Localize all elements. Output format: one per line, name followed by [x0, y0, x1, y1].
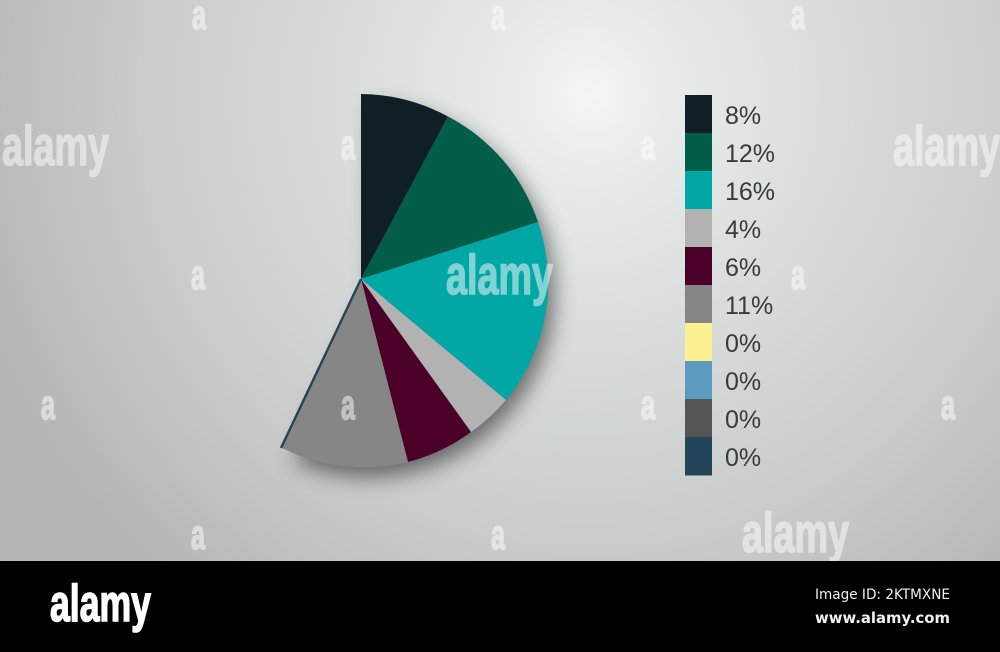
- watermarks: alamy: [742, 501, 849, 564]
- footer logo: alamy: [50, 575, 151, 633]
- watermarks: a: [341, 121, 355, 168]
- watermarks: a: [641, 121, 655, 168]
- legend row: 0% dark grey: 0%: [725, 406, 761, 434]
- legend row: 16%: 16%: [725, 178, 775, 206]
- watermarks: a: [641, 381, 655, 428]
- legend row: 12%: 12%: [725, 140, 775, 168]
- slice: 4%: [361, 279, 506, 432]
- pie chart: [281, 94, 548, 467]
- legend row: 0% yellow: [685, 323, 761, 361]
- watermarks: alamy: [446, 243, 553, 306]
- image id: Image ID: 2KTMXNE: [815, 587, 950, 603]
- legend row: 11%: 11%: [725, 292, 773, 320]
- legend row: 6%: [685, 247, 761, 285]
- slice: 8%: [361, 94, 448, 279]
- website: www.alamy.com: [815, 609, 950, 627]
- watermarks: alamy: [2, 114, 109, 177]
- slice edge: 0%: [281, 279, 361, 448]
- legend row: 0% blue: 0%: [725, 368, 761, 396]
- legend row: 0% navy: 0%: [725, 444, 761, 472]
- legend row: 0% blue: [685, 361, 761, 399]
- watermarks: a: [341, 381, 355, 428]
- slice: 6%: [361, 279, 471, 462]
- legend row: 11%: [685, 285, 773, 323]
- legend row: 8%: 8%: [725, 102, 761, 130]
- pie shadow: [294, 107, 554, 477]
- legend row: 6%: 6%: [725, 254, 761, 282]
- footer bar: [0, 561, 1000, 652]
- slice: 12%: [361, 116, 538, 279]
- legend row: 4%: [685, 209, 761, 247]
- watermarks: a: [41, 381, 55, 428]
- legend row: 8%: [685, 95, 761, 133]
- watermarks: a: [791, 251, 805, 298]
- legend row: 0% dark grey: [685, 399, 761, 437]
- watermarks: a: [191, 251, 205, 298]
- watermarks: a: [941, 381, 955, 428]
- watermarks: a: [491, 511, 505, 558]
- legend row: 4%: 4%: [725, 216, 761, 244]
- legend row: 0% navy: [685, 437, 761, 476]
- legend: [685, 95, 775, 476]
- slice: 11%: [282, 279, 408, 467]
- watermarks: a: [191, 511, 205, 558]
- slice: 16%: [361, 222, 548, 400]
- legend row: 12%: [685, 133, 775, 171]
- legend row: 16%: [685, 171, 775, 209]
- legend row: 0% yellow: 0%: [725, 330, 761, 358]
